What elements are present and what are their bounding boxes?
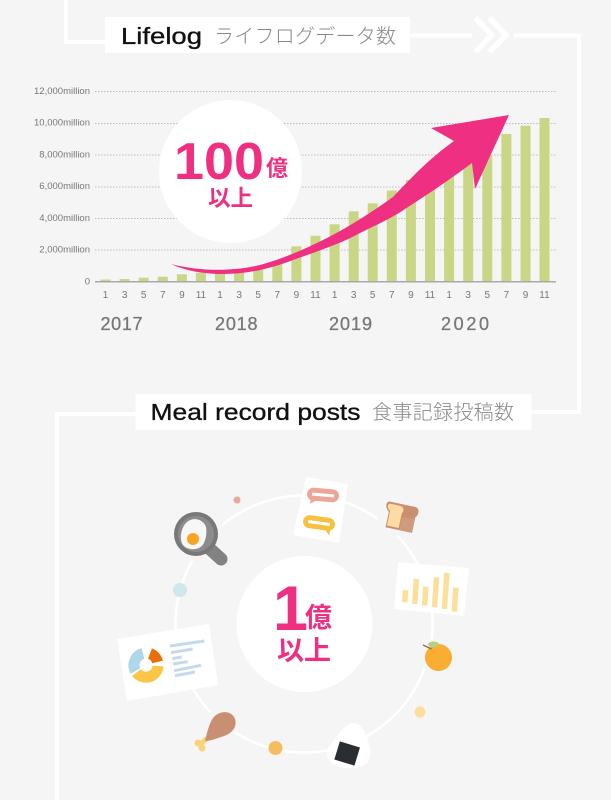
icon: rice ball (327, 723, 370, 768)
callout: 100 oku or more: 億 (266, 151, 288, 183)
x axis month labels: 5 (141, 290, 147, 301)
x axis month labels: 1 (103, 290, 109, 301)
x axis month labels: 11 (196, 290, 207, 301)
x axis month labels: 1 (217, 290, 223, 301)
x axis month labels: 9 (523, 290, 529, 301)
x axis month labels: 3 (465, 290, 471, 301)
icon: double chevron arrow (476, 18, 506, 52)
chart gridlines and y axis labels: 8,000million (39, 150, 90, 160)
dot: salmon (234, 496, 240, 504)
dot: light blue (173, 583, 187, 597)
callout: 100 oku or more: 100 (174, 133, 264, 191)
icon: chat bubbles card (293, 477, 348, 543)
callout: 1 oku or more: 1 (273, 574, 308, 644)
heading: Lifelog: Lifelog (121, 23, 202, 49)
donut chart (134, 654, 158, 677)
chart bars (100, 118, 550, 282)
dot: orange (268, 741, 282, 755)
x axis month labels: 3 (122, 290, 128, 301)
x axis month labels: 9 (179, 290, 185, 301)
callout: 100 oku or more: 以上 (208, 181, 253, 213)
x axis month labels: 11 (425, 290, 436, 301)
callout: 100 oku or more (159, 100, 302, 243)
icon: bread loaf (375, 494, 425, 540)
x axis month labels: 1 (332, 290, 338, 301)
x axis month labels: 7 (389, 290, 395, 301)
x axis month labels (103, 290, 550, 301)
callout: 1 oku or more: 以上 (277, 629, 331, 668)
heading: Meal record posts: Meal record posts (150, 399, 360, 425)
callout: 1 oku or more: 億 (305, 596, 332, 635)
chart gridlines and y axis labels (34, 86, 557, 288)
x axis month labels: 5 (255, 290, 261, 301)
legend lines (170, 641, 204, 676)
x axis year labels: 2018 (215, 314, 258, 334)
icon: report card with donut chart (117, 624, 218, 701)
x axis month labels: 7 (504, 290, 510, 301)
x axis month labels: 7 (160, 290, 166, 301)
x axis year labels: 2019 (329, 314, 372, 334)
chart gridlines and y axis labels: 4,000million (39, 213, 90, 224)
x axis month labels: 11 (310, 290, 321, 301)
chart gridlines and y axis labels: 12,000million (34, 86, 90, 97)
bar chart: lifelog data count (34, 86, 557, 334)
icon: orange (420, 639, 456, 675)
arrow: rising growth curve (171, 115, 509, 274)
heading: Meal record posts (136, 394, 532, 430)
chart gridlines and y axis labels: 0 (85, 276, 90, 288)
icon: bar chart card (394, 562, 469, 616)
heading: Lifelog: ライフログデータ数 (214, 20, 396, 49)
dot: pale yellow (414, 706, 426, 718)
icon: chicken drumstick (194, 708, 238, 752)
x axis month labels: 1 (446, 290, 452, 301)
chart gridlines and y axis labels: 6,000million (39, 181, 90, 192)
x axis month labels: 11 (539, 290, 550, 301)
x axis month labels: 7 (275, 290, 281, 301)
x axis month labels: 9 (294, 290, 300, 301)
chart gridlines and y axis labels: 2,000million (39, 244, 90, 256)
x axis month labels: 5 (485, 290, 491, 301)
icon: frying pan with egg (169, 507, 223, 561)
x axis year labels (100, 314, 489, 334)
chart gridlines and y axis labels: 10,000million (34, 118, 90, 128)
x axis month labels: 9 (408, 290, 414, 301)
x axis month labels: 3 (236, 290, 242, 301)
heading: Lifelog (105, 17, 410, 53)
x axis month labels: 5 (370, 290, 376, 301)
ring: meal diagram (176, 496, 432, 752)
x axis year labels: 2017 (100, 314, 142, 334)
x axis year labels: 2020 (441, 314, 489, 334)
heading: Meal record posts: 食事記録投稿数 (372, 396, 514, 425)
callout: 1 oku or more (236, 556, 372, 692)
x axis month labels: 3 (351, 290, 357, 301)
